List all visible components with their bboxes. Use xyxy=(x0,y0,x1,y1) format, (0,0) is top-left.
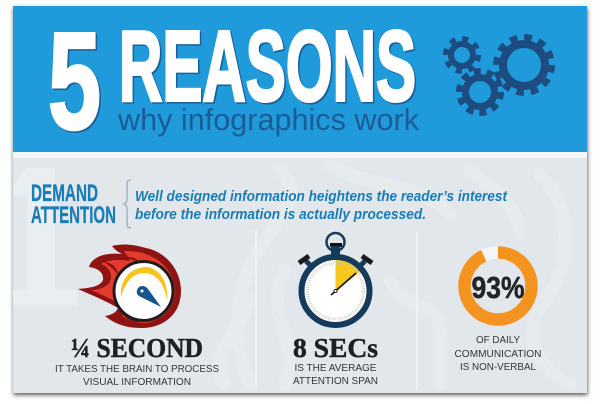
intro text: before the information is actually processed. xyxy=(135,207,426,223)
caption xyxy=(293,363,378,387)
stat: 93 percent xyxy=(454,252,542,373)
watermark numeral 1 xyxy=(13,168,77,305)
caption xyxy=(454,335,542,373)
icon: stopwatch xyxy=(299,233,372,325)
heading: demand attention: ATTENTION xyxy=(31,202,116,229)
stat: 8 seconds xyxy=(293,233,378,387)
bracket xyxy=(124,180,131,228)
stat: quarter second xyxy=(55,245,219,388)
caption: IS THE AVERAGE xyxy=(294,363,377,374)
icon: gears xyxy=(446,38,552,112)
donut chart: 93% xyxy=(472,270,524,305)
intro text: Well designed information heightens the reader’s interest xyxy=(135,189,508,205)
title: 5 REASONS: REASONS xyxy=(119,10,416,122)
caption: IT TAKES THE BRAIN TO PROCESS xyxy=(55,364,219,375)
title: 5 REASONS: 5 xyxy=(50,6,102,160)
caption: VISUAL INFORMATION xyxy=(83,377,191,388)
value: quarter second: ¼ SECOND xyxy=(71,333,203,363)
intro text xyxy=(135,189,508,223)
value: 8 secs: 8 SECs xyxy=(293,333,378,363)
heading: demand attention: DEMAND xyxy=(31,180,98,207)
dividers xyxy=(256,230,417,390)
header band xyxy=(13,4,587,160)
caption: COMMUNICATION xyxy=(454,349,542,360)
title: 5 REASONS: 5 xyxy=(48,4,101,158)
caption: IS NON-VERBAL xyxy=(460,362,536,373)
icon: flaming speedometer xyxy=(78,245,181,328)
heading: demand attention xyxy=(31,180,116,229)
title: 5 REASONS xyxy=(48,4,418,160)
caption xyxy=(55,364,219,388)
caption: OF DAILY xyxy=(476,335,520,346)
subtitle: why infographics work xyxy=(117,102,419,137)
caption: ATTENTION SPAN xyxy=(293,376,378,387)
